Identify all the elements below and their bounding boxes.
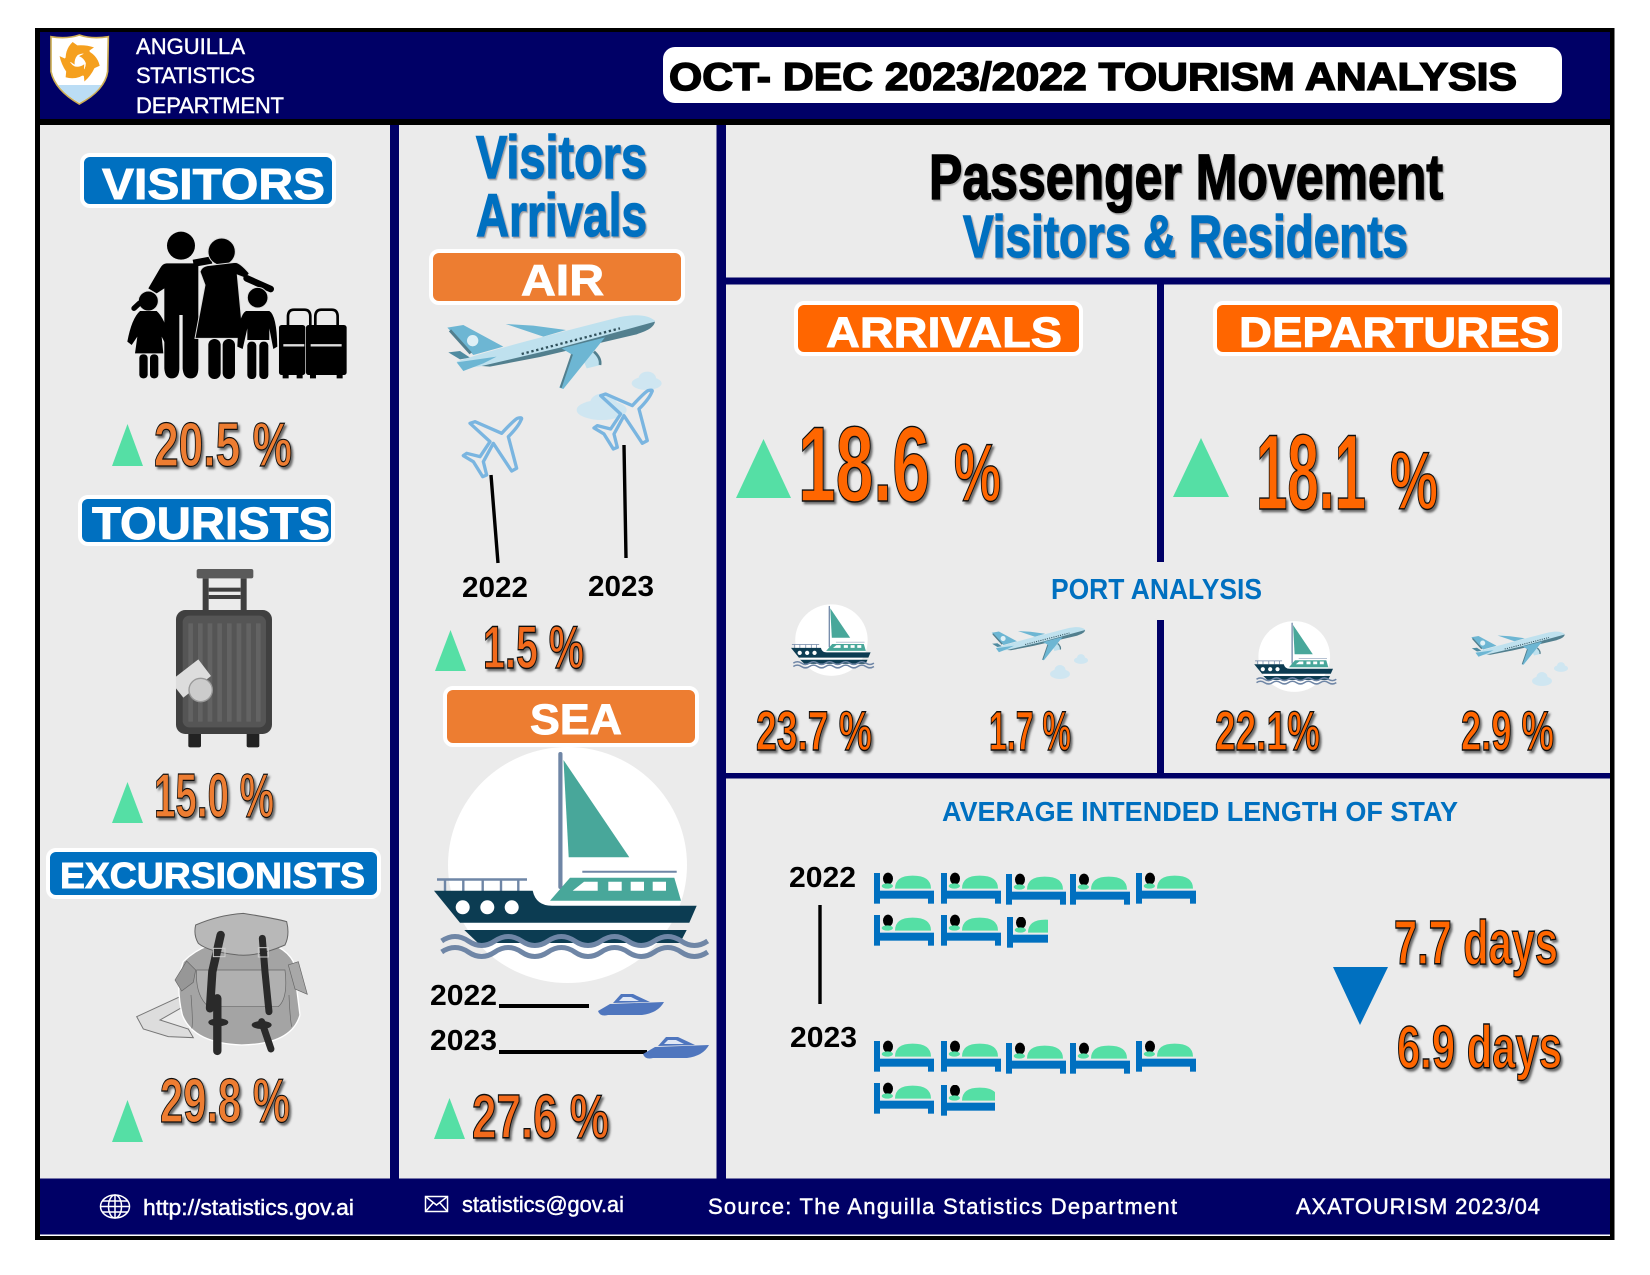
icon: departures ship <box>1254 621 1336 692</box>
icon: clouds and outlined planes <box>463 372 662 477</box>
title <box>663 47 1562 103</box>
panel: visitor arrivals <box>399 124 717 1178</box>
header band <box>40 32 1610 119</box>
sea year lines with boats <box>430 980 709 1058</box>
stat: arrivals by air: 1.7 % <box>989 699 1071 762</box>
website: http://statistics.gov.ai <box>143 1195 354 1220</box>
department name <box>136 34 284 118</box>
stat: excursionists change: 29.8 % <box>160 1067 290 1136</box>
stat: visitors change: 20.5 % <box>154 411 292 480</box>
stat: arrivals change: 18.6 <box>798 404 930 524</box>
heading: port analysis: PORT ANALYSIS <box>1051 574 1262 606</box>
dividers <box>390 119 1610 1179</box>
arrow up <box>736 439 791 498</box>
icon: globe <box>100 1195 130 1218</box>
stay year axis <box>789 862 857 1054</box>
stat: stay 2023: 6.9 days <box>1397 1014 1562 1081</box>
badge: visitors: VISITORS <box>102 160 325 209</box>
arrow up <box>112 782 143 823</box>
heading: passenger movement: Passenger Movement <box>929 141 1443 213</box>
stay year axis: 2022 <box>789 862 856 894</box>
badge: arrivals <box>796 303 1081 357</box>
air year labels <box>462 571 654 604</box>
icon: arrivals plane <box>992 627 1088 679</box>
heading: passenger movement: Visitors & Residents <box>963 204 1408 270</box>
department name: ANGUILLA <box>136 34 245 59</box>
arrow down <box>1333 967 1388 1025</box>
arrow up <box>112 424 143 466</box>
heading: visitors arrivals <box>476 124 647 249</box>
beds: 2022 <box>874 873 1196 948</box>
icon: departures plane <box>1471 632 1568 686</box>
stat: arrivals change: % <box>954 428 1001 519</box>
logo: Anguilla shield <box>51 35 108 104</box>
sea year lines with boats: 2022 <box>430 980 497 1012</box>
footer band <box>40 1178 1610 1236</box>
arrow up <box>1173 438 1229 497</box>
stat: arrivals by sea: 23.7 % <box>756 699 872 762</box>
title: OCT- DEC 2023/2022 TOURISM ANALYSIS <box>669 56 1517 99</box>
stat: departures by air: 2.9 % <box>1461 699 1554 762</box>
badge: arrivals: ARRIVALS <box>826 309 1062 357</box>
beds: 2023 <box>874 1041 1196 1116</box>
email: statistics@gov.ai <box>462 1192 624 1217</box>
icon: arrivals ship <box>791 604 874 676</box>
badge: sea: SEA <box>530 696 622 744</box>
icon: ship <box>434 747 708 983</box>
badge: sea <box>445 688 697 745</box>
publication code: AXATOURISM 2023/04 <box>1296 1194 1540 1219</box>
heading: visitors arrivals: Arrivals <box>476 182 647 249</box>
air year labels: 2023 <box>588 571 654 603</box>
heading: visitors arrivals: Visitors <box>476 124 647 191</box>
panel: passenger movement <box>726 125 1610 1178</box>
icon: backpack <box>137 913 307 1051</box>
source: Source: The Anguilla Statistics Department <box>708 1194 1177 1219</box>
icon: mail <box>426 1196 448 1212</box>
stat: departures change: 18.1 <box>1256 412 1366 532</box>
badge: excursionists: EXCURSIONISTS <box>60 855 365 896</box>
stat: departures by sea: 22.1% <box>1215 699 1320 762</box>
badge: air <box>431 251 683 305</box>
sea year lines with boats: 2023 <box>430 1025 497 1057</box>
stat: tourists change: 15.0 % <box>154 762 274 831</box>
panel: visitors <box>40 125 390 1178</box>
badge: tourists: TOURISTS <box>92 498 330 549</box>
badge: departures: DEPARTURES <box>1239 309 1550 357</box>
badge: air: AIR <box>521 256 604 305</box>
stat: departures change: % <box>1390 436 1438 527</box>
icon: suitcase <box>176 569 272 747</box>
stay year axis: 2023 <box>790 1022 857 1054</box>
stat: stay 2022: 7.7 days <box>1394 909 1558 978</box>
arrow up <box>112 1100 143 1142</box>
air year labels: 2022 <box>462 572 528 604</box>
icon: family with luggage <box>127 232 347 379</box>
air year lines <box>491 445 626 563</box>
heading: passenger movement <box>929 141 1443 270</box>
icon: airliner <box>447 315 655 389</box>
heading: average intended length of stay: AVERAGE INTENDED LENGTH OF STAY <box>942 796 1458 827</box>
arrow up <box>434 1098 465 1139</box>
stat: air change: 1.5 % <box>483 614 584 681</box>
stat: sea change: 27.6 % <box>472 1083 609 1152</box>
department name: STATISTICS <box>136 63 255 88</box>
arrow up <box>435 630 466 671</box>
department name: DEPARTMENT <box>136 93 284 118</box>
